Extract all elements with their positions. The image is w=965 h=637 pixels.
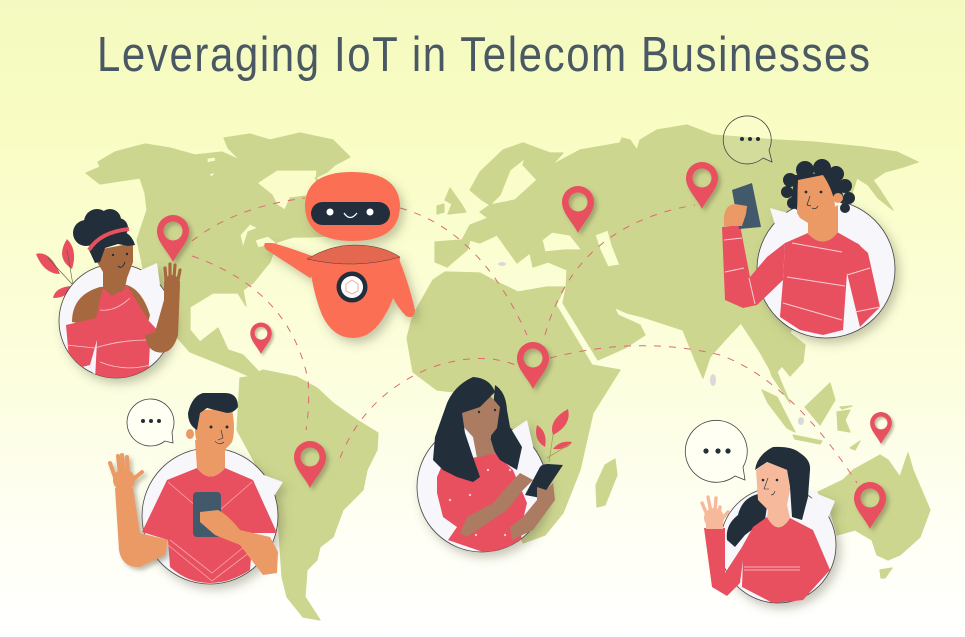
person: woman with headband, left (36, 209, 180, 380)
holding arm (200, 510, 278, 575)
hair (781, 159, 855, 213)
dress (437, 453, 527, 552)
title: Leveraging IoT in Telecom Businesses (97, 27, 870, 82)
pin: North America (157, 215, 189, 262)
robot face (326, 208, 374, 218)
pin: South America (294, 441, 326, 488)
dashed connection lines (192, 198, 857, 483)
face details (478, 409, 496, 413)
neck (195, 440, 225, 476)
robot visor (311, 202, 390, 225)
headband (89, 229, 129, 250)
map: Africa (407, 272, 620, 543)
ear (186, 429, 194, 439)
speech bubble (685, 420, 747, 482)
portrait circle (720, 487, 836, 603)
raised arm (145, 264, 180, 353)
map: grey lake and island details (498, 262, 804, 425)
sweater body (780, 232, 860, 335)
arm holding (510, 483, 555, 540)
person: man with phone, bottom left (110, 393, 283, 584)
hand (724, 204, 747, 226)
sweater stripes (783, 243, 880, 320)
plant leaves (536, 409, 572, 462)
hair buns (73, 209, 128, 246)
robot chest light (336, 272, 368, 302)
pin: Caribbean (250, 323, 272, 354)
portrait circle (142, 448, 283, 584)
portrait circle (59, 263, 173, 378)
phone (193, 492, 221, 537)
pin: Africa (517, 342, 549, 389)
neck and face (462, 392, 500, 458)
shoulders (72, 285, 150, 323)
pin: Asia (686, 162, 718, 209)
person: woman with phone, centre (417, 377, 572, 552)
pin: Eastern Europe (562, 186, 594, 233)
hair (188, 393, 238, 430)
ear (833, 193, 843, 203)
sleeve stripes (724, 238, 755, 304)
sleeve arm (722, 225, 785, 308)
person: man with phone, top right (722, 116, 895, 338)
face (195, 409, 234, 454)
wavy hair (727, 494, 768, 547)
robot head (305, 172, 400, 241)
face (797, 175, 835, 226)
portrait circle (757, 200, 895, 338)
map: islands (437, 188, 930, 578)
plant (36, 239, 74, 298)
robot (264, 172, 415, 338)
world map (86, 125, 930, 620)
neck and face (97, 243, 133, 296)
bangs (89, 230, 135, 263)
facial features (762, 478, 778, 495)
phone (525, 464, 563, 498)
waving arm (704, 527, 753, 596)
sweater right arm (845, 243, 880, 327)
person: woman waving, bottom right (685, 420, 836, 603)
dress (66, 285, 162, 380)
hair top (755, 447, 810, 520)
robot right arm (392, 257, 415, 317)
pin: New Guinea (870, 412, 892, 444)
hand (702, 497, 728, 529)
robot shoulders (307, 245, 400, 264)
waving arm (110, 455, 168, 567)
facial features (805, 191, 822, 209)
dress dots (449, 469, 511, 536)
hair right (490, 385, 522, 470)
map: Eurasia (435, 125, 918, 403)
portrait circle (417, 420, 547, 552)
face details (112, 253, 128, 267)
phone (732, 183, 761, 229)
arm pointing (460, 473, 533, 537)
facial features (210, 426, 228, 444)
map: North America (86, 133, 350, 378)
map: South America (237, 370, 378, 620)
shirt chevrons (168, 482, 252, 581)
speech bubble (127, 399, 174, 446)
sweater (742, 517, 830, 603)
neck and face (756, 462, 790, 527)
robot body (309, 257, 400, 338)
t-shirt (142, 468, 277, 583)
pin: Australia (854, 482, 886, 529)
hair left (433, 377, 495, 482)
robot left arm (264, 243, 320, 278)
speech bubble (723, 116, 772, 164)
neck (808, 205, 838, 242)
